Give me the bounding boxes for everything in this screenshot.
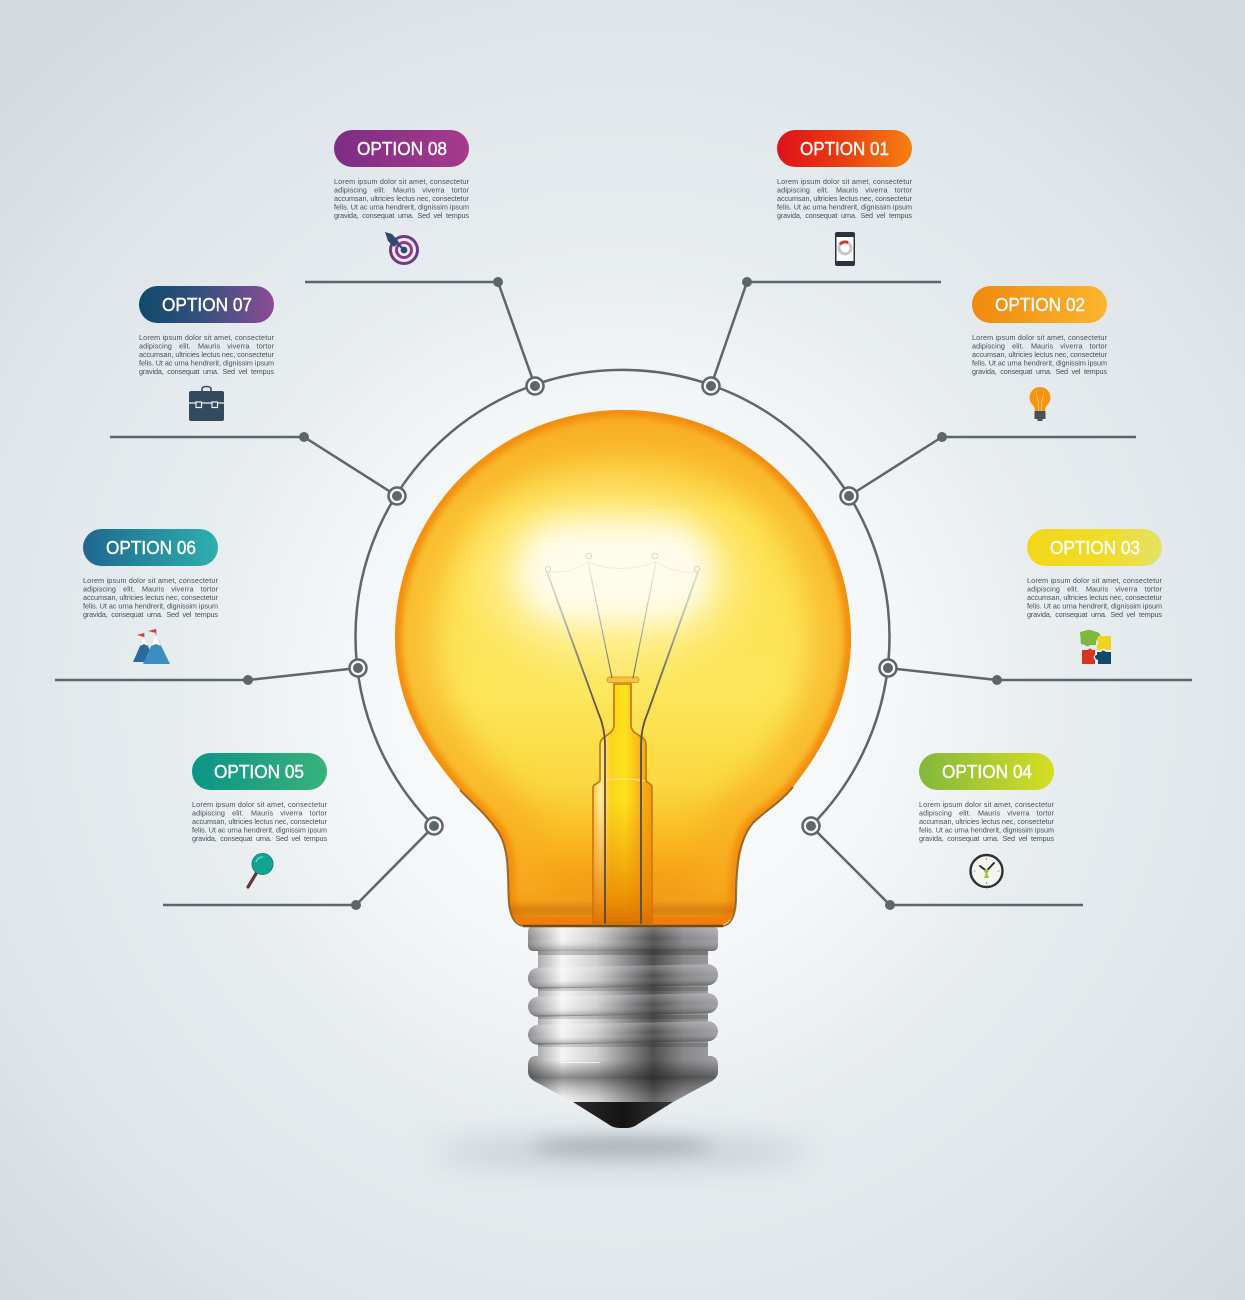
icon: mountains with flags: [133, 629, 170, 664]
description text: Lorem ipsum dolor sit amet, consectetur: [972, 333, 1108, 342]
label pill: OPTION 03: [1050, 538, 1140, 558]
description text: gravida, consequat urna. Sed vel tempus: [1027, 610, 1162, 619]
label pill: OPTION 04: [942, 762, 1032, 782]
panel: option 07: [139, 286, 275, 421]
description text: accumsan, ultricies lectus nec, consectetur: [334, 194, 470, 203]
description text: [919, 800, 1055, 843]
label pill: OPTION 02: [995, 295, 1085, 315]
description text: felis. Ut ac urna hendrerit, dignissim ipsum: [919, 826, 1054, 834]
icon: small light bulb: [1030, 387, 1050, 421]
panel: option 04: [919, 753, 1055, 887]
icon: briefcase: [189, 386, 224, 421]
filament wires: [545, 553, 700, 923]
description text: Lorem ipsum dolor sit amet, consectetur: [192, 800, 328, 809]
description text: [83, 576, 219, 619]
description text: adipiscing elit. Mauris viverra tortor: [972, 342, 1108, 350]
description text: [1027, 576, 1163, 619]
description text: felis. Ut ac urna hendrerit, dignissim ipsum: [83, 602, 218, 610]
connector lines: [55, 277, 1192, 910]
description text: [972, 333, 1108, 376]
icon: smartphone: [835, 232, 855, 266]
ground shadow: [432, 1138, 812, 1164]
description text: accumsan, ultricies lectus nec, consectetur: [777, 194, 913, 203]
description text: [334, 177, 470, 220]
icon: target with dart: [385, 232, 419, 265]
description text: Lorem ipsum dolor sit amet, consectetur: [777, 177, 913, 186]
glass stem: [593, 677, 652, 923]
description text: felis. Ut ac urna hendrerit, dignissim ipsum: [777, 202, 912, 212]
description text: [192, 800, 328, 843]
description text: felis. Ut ac urna hendrerit, dignissim ipsum: [334, 202, 469, 212]
description text: gravida, consequat urna. Sed vel tempus: [83, 610, 218, 619]
description text: felis. Ut ac urna hendrerit, dignissim ipsum: [139, 358, 274, 368]
description text: [139, 333, 275, 376]
description text: Lorem ipsum dolor sit amet, consectetur: [83, 576, 219, 585]
description text: gravida, consequat urna. Sed vel tempus: [192, 834, 327, 843]
description text: adipiscing elit. Mauris viverra tortor: [334, 186, 470, 194]
description text: Lorem ipsum dolor sit amet, consectetur: [919, 800, 1055, 809]
description text: accumsan, ultricies lectus nec, consectetur: [919, 817, 1055, 826]
description text: gravida, consequat urna. Sed vel tempus: [972, 367, 1107, 376]
light bulb: [380, 400, 870, 1128]
label pill: OPTION 01: [800, 139, 889, 159]
outer ring around bulb: [356, 370, 890, 826]
description text: felis. Ut ac urna hendrerit, dignissim ipsum: [972, 358, 1107, 368]
description text: adipiscing elit. Mauris viverra tortor: [919, 808, 1055, 818]
description text: Lorem ipsum dolor sit amet, consectetur: [1027, 576, 1163, 585]
description text: Lorem ipsum dolor sit amet, consectetur: [139, 333, 275, 342]
icon: clock: [970, 855, 1002, 887]
label pill: OPTION 05: [214, 762, 304, 782]
ring nodes: [350, 378, 896, 834]
description text: gravida, consequat urna. Sed vel tempus: [919, 834, 1054, 843]
label pill: OPTION 08: [357, 139, 447, 159]
panel: option 06: [83, 529, 219, 664]
panel: option 08: [334, 130, 470, 265]
description text: accumsan, ultricies lectus nec, consectetur: [972, 350, 1108, 359]
icon: magnifying glass: [248, 854, 273, 887]
screw base: [528, 926, 718, 1102]
description text: accumsan, ultricies lectus nec, consectetur: [83, 593, 219, 602]
panel: option 01: [777, 130, 913, 266]
description text: gravida, consequat urna. Sed vel tempus: [334, 211, 469, 220]
description text: [777, 177, 913, 220]
description text: felis. Ut ac urna hendrerit, dignissim ipsum: [1027, 602, 1162, 610]
description text: adipiscing elit. Mauris viverra tortor: [777, 186, 913, 194]
description text: adipiscing elit. Mauris viverra tortor: [83, 584, 219, 594]
description text: accumsan, ultricies lectus nec, consectetur: [1027, 593, 1163, 602]
glass envelope: [380, 400, 870, 930]
description text: felis. Ut ac urna hendrerit, dignissim ipsum: [192, 826, 327, 834]
label pill: OPTION 06: [106, 538, 196, 558]
contact tip: [573, 1102, 673, 1128]
icon: puzzle pieces: [1080, 630, 1111, 664]
description text: gravida, consequat urna. Sed vel tempus: [777, 211, 912, 220]
description text: accumsan, ultricies lectus nec, consectetur: [192, 817, 328, 826]
panel: option 02: [972, 286, 1108, 421]
description text: accumsan, ultricies lectus nec, consectetur: [139, 350, 275, 359]
description text: adipiscing elit. Mauris viverra tortor: [1027, 584, 1163, 594]
description text: adipiscing elit. Mauris viverra tortor: [192, 808, 328, 818]
description text: gravida, consequat urna. Sed vel tempus: [139, 367, 274, 376]
description text: Lorem ipsum dolor sit amet, consectetur: [334, 177, 470, 186]
panel: option 03: [1027, 529, 1163, 664]
panel: option 05: [192, 753, 328, 887]
label pill: OPTION 07: [162, 295, 252, 315]
description text: adipiscing elit. Mauris viverra tortor: [139, 342, 275, 350]
